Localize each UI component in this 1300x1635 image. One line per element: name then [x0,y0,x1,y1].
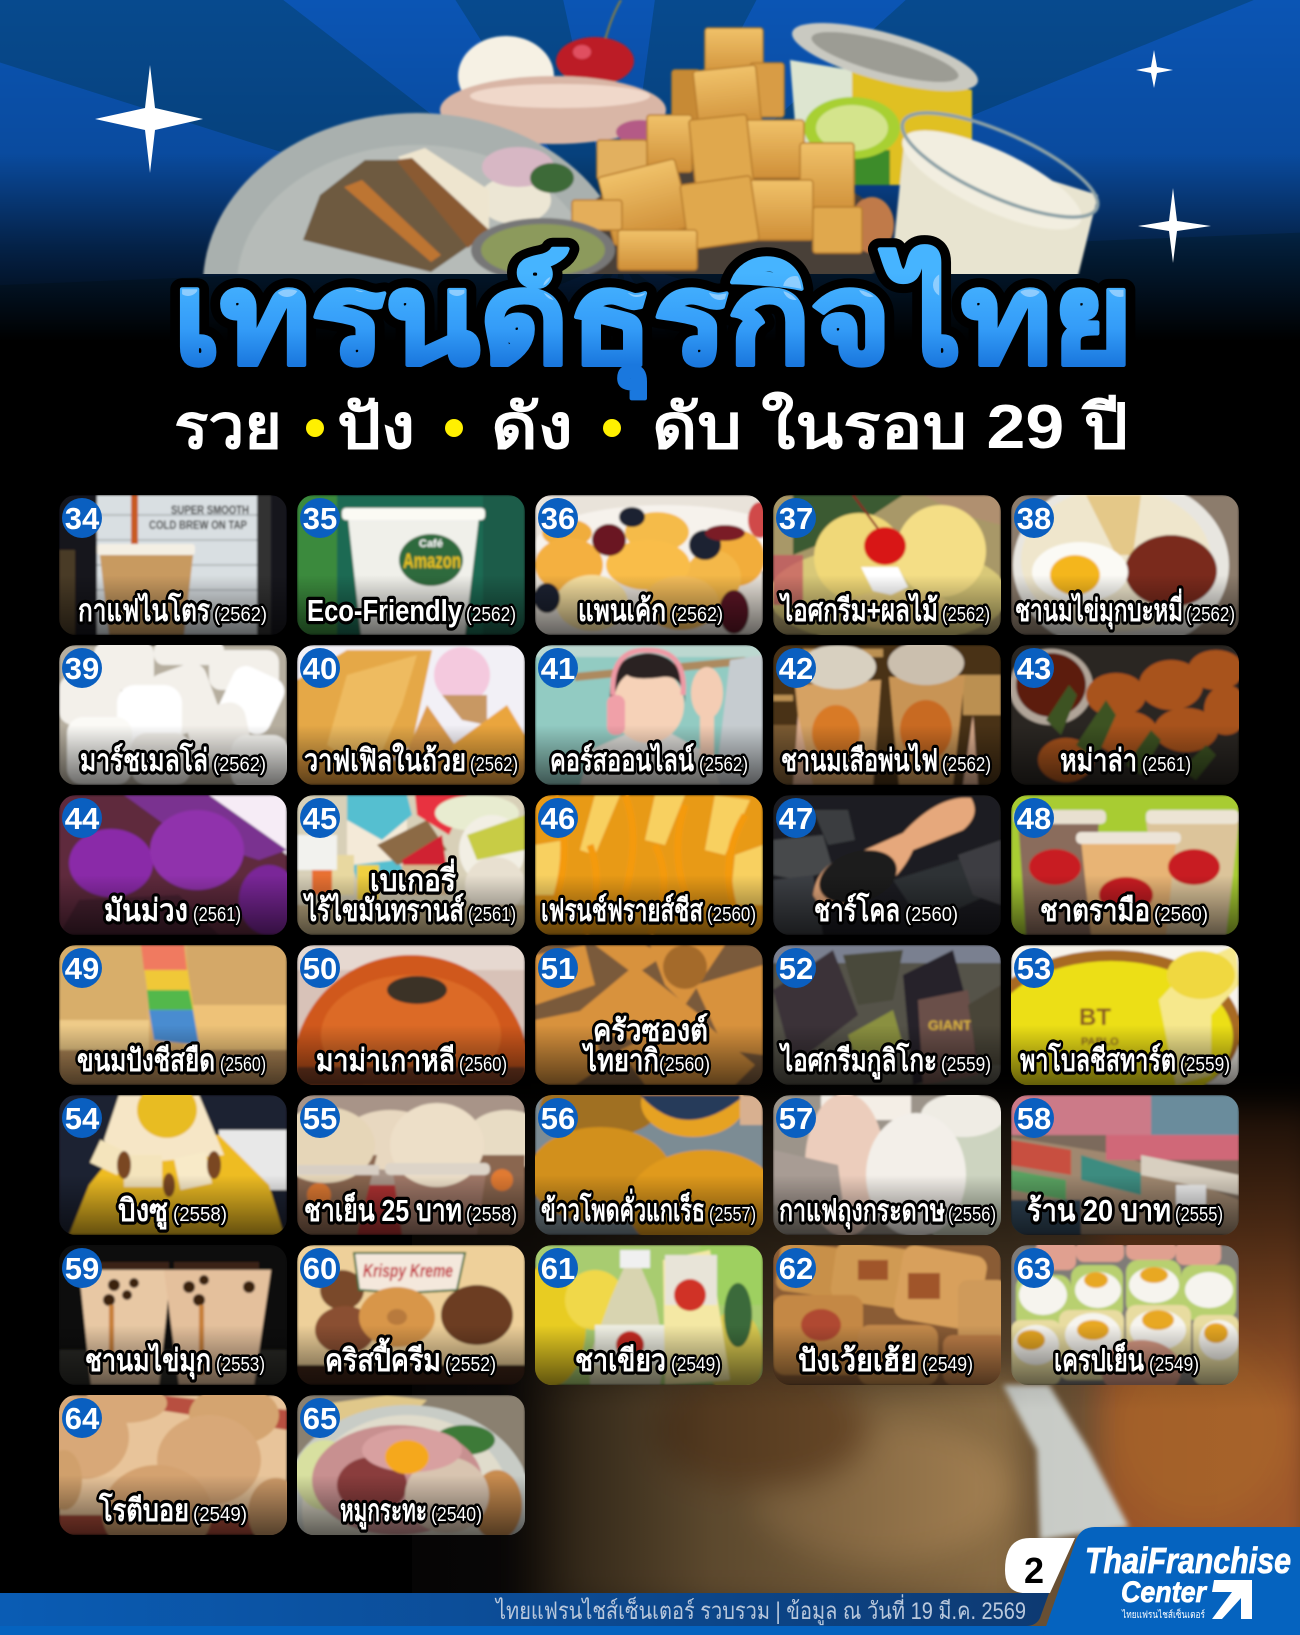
label: ชาเย็น 25 บาท [304,1191,462,1228]
label: ข้าวโพดคั่วแกเร็ธ [541,1188,705,1228]
badge: 38 [1017,501,1051,536]
card 49 [59,945,287,1085]
badge: 42 [779,651,813,686]
badge: 48 [1017,801,1051,836]
logo panel [1043,1527,1300,1635]
year: (2562) [466,604,516,626]
glass of milk [892,109,1101,274]
year: (2549) [193,1504,247,1526]
photo [773,641,1001,785]
photo [297,795,525,935]
photo [59,1245,287,1385]
card 34 [59,495,287,635]
photo [773,1090,1015,1250]
card 57 [773,1090,1015,1250]
badge: 39 [65,651,99,686]
year: (2560) [659,1054,710,1076]
card 59 [59,1245,287,1385]
card 53 [981,945,1241,1113]
photo [514,1245,763,1400]
label: โรตีบอย [98,1492,189,1528]
icon: sparkle medium [1138,188,1211,263]
label: ชานมเสือพ่นไฟ [781,742,938,778]
badge: 65 [303,1401,337,1436]
badge: 62 [779,1251,813,1286]
year: (2561) [468,904,516,926]
badge: 40 [303,651,337,686]
card 45 [297,795,525,935]
year: (2560) [459,1054,507,1076]
label: ชานมไข่มุก [85,1342,211,1380]
photo [282,1395,532,1605]
logo panel: Center [1121,1576,1208,1609]
badge: 54 [65,1101,100,1136]
year: (2558) [466,1204,517,1226]
subtitle: ดัง [491,393,573,462]
photo [59,795,299,935]
badge: 52 [779,951,813,986]
photo [1009,645,1248,785]
year: (2562) [1186,604,1235,626]
year: (2555) [1175,1204,1223,1226]
card 60 [297,1245,525,1385]
label: ปังเว้ยเฮ้ย [798,1343,917,1378]
source text: ไทยแฟรนไชส์เซ็นเตอร์ รวบรวม | ข้อมูล ณ วันที่ 19 มี.ค. 2569 [494,1594,1026,1626]
year: (2556) [948,1204,996,1226]
pink sundae bowl [440,76,666,144]
photo [773,945,1001,1085]
photo [1011,1095,1239,1235]
bowl behind bread [588,168,876,274]
photo: Krispy Kreme [363,1261,453,1281]
photo: PABLO [1081,1036,1119,1048]
badge: 49 [65,951,99,986]
icon: sparkle large [95,65,203,173]
label: หมูกระทะ [340,1493,427,1530]
label: มาร์ชเมลโล่ [80,742,208,778]
label: เครปเย็น [1054,1341,1144,1378]
label: แพนเค้ก [578,593,666,628]
card 51 [535,945,763,1085]
card 52 [773,945,1001,1085]
badge: 45 [303,801,337,836]
badge: 56 [541,1101,575,1136]
card 36 [535,495,763,635]
photo [59,1082,287,1235]
year: (2562) [470,754,518,776]
badge: 36 [541,501,575,536]
year: (2559) [1180,1054,1230,1076]
label line 2: ไร้ไขมันทรานส์ [303,892,464,928]
can [786,9,984,185]
badge: 34 [65,501,100,536]
fish [303,147,574,272]
year: (2557) [709,1204,756,1226]
year: (2561) [193,904,241,926]
bread cubes [572,28,862,270]
photo [59,640,289,790]
year: (2549) [1149,1354,1199,1376]
sauce cup [471,218,615,282]
photo [1011,1240,1239,1400]
year: (2560) [707,904,756,926]
year: (2562) [942,754,991,776]
logo panel: ไทยแฟรนไชส์เซ็นเตอร์ [1121,1607,1206,1621]
photo [59,945,287,1085]
year: (2560) [220,1054,266,1076]
subtitle: รวย [174,393,282,462]
label: ชาตรามือ [1040,893,1150,928]
year: (2560) [1154,904,1208,926]
badge: 37 [779,501,813,536]
card 43 [1009,645,1248,785]
badge: 46 [541,801,575,836]
badge: 53 [1017,951,1051,986]
photo: BT [1079,1004,1111,1031]
badge: 63 [1017,1251,1051,1286]
label: เฟรนช์ฟรายส์ชีส [541,893,703,928]
label: ชาเขียว [575,1343,666,1378]
subtitle [174,391,1128,462]
year: (2549) [922,1354,973,1376]
photo [297,645,525,785]
cherry [556,0,634,85]
photo [773,495,1001,635]
yellow dot [603,419,621,437]
badge: 44 [65,801,100,836]
ice cream scoop [456,34,556,92]
card 46 [535,795,763,935]
badge: 58 [1017,1101,1051,1136]
year: (2562) [213,754,266,776]
photo [297,1245,525,1385]
label: ไอศกรีมกูลิโกะ [779,1042,937,1080]
badge: 50 [303,951,337,986]
photo [981,945,1241,1113]
year: (2540) [431,1504,482,1526]
footer bar [0,1593,1300,1635]
subtitle: ดับ ในรอบ 29 ปี [652,391,1128,462]
label: มาม่าเกาหลี [316,1043,455,1078]
label: คริสปี้ครีม [325,1337,441,1378]
card 62 [773,1240,1008,1385]
card 39 [59,640,289,790]
icon: sparkle small [1136,50,1173,88]
badge: 61 [541,1251,575,1286]
label: ร้าน 20 บาท [1027,1193,1171,1228]
card 55 [275,1095,549,1235]
blurred tart background photo [412,1095,1300,1626]
title: เทรนด์ธุรกิจไทย [173,246,1133,399]
year: (2559) [941,1054,991,1076]
badge: 60 [303,1251,337,1286]
photo [535,645,763,785]
photo [1011,795,1239,935]
photo: Amazon [403,550,461,573]
year: (2560) [905,904,958,926]
subtitle: ปัง [337,393,415,462]
badge: 51 [541,951,575,986]
label: ไอศกรีม+ผลไม้ [779,592,938,628]
plate [202,112,602,274]
label line 2: ไทยากิ [582,1042,659,1078]
photo [59,495,287,635]
card 40 [297,645,525,785]
photo [39,1383,304,1561]
photo: Café [419,538,443,550]
photo [528,1069,783,1260]
badge: 47 [779,801,813,836]
photo: SUPER SMOOTH [171,503,249,517]
year: (2562) [942,604,990,626]
label: ชาร์โคล [814,892,900,928]
card 48 [1011,795,1239,935]
photo [535,945,763,1085]
card 41 [535,645,763,785]
card 56 [528,1069,783,1260]
card 37 [773,495,1001,635]
badge: 43 [1017,651,1051,686]
card 42 [773,641,1001,785]
card 63 [1011,1240,1239,1400]
year: (2552) [445,1354,496,1376]
photo [275,1095,549,1235]
page number tab: 2 [1024,1550,1044,1591]
label: กาแฟถุงกระดาษ [779,1193,945,1230]
label: เบเกอรี่ [370,858,456,898]
photo [1011,495,1239,635]
card 54 [59,1082,287,1235]
photo [773,795,1001,935]
year: (2549) [671,1354,721,1376]
photo: COLD BREW ON TAP [149,518,247,532]
label: Eco-Friendly [307,593,463,628]
title: เทรนด์ธุรกิจไทย [173,246,1133,399]
card 61 [514,1245,763,1400]
card 44 [59,795,299,935]
label: คอร์สออนไลน์ [550,742,694,778]
label: ครัวซองต์ [593,1013,708,1048]
yellow dot [445,419,463,437]
yellow dot [306,419,324,437]
photo [293,945,529,1185]
year: (2562) [699,754,748,776]
year: (2561) [1142,754,1191,776]
label: กาแฟไนโตร [78,592,210,628]
badge: 41 [541,651,575,686]
year: (2562) [214,604,267,626]
photo [773,1240,1008,1385]
card 50 [293,945,529,1185]
card 38 [1011,495,1239,635]
card 58 [1011,1095,1239,1235]
badge: 35 [303,501,337,536]
hero food photo collage [202,0,1101,274]
badge: 64 [65,1401,100,1436]
label: ชานมไข่มุกบะหมี่ [1015,588,1183,630]
label: พาโบลชีสทาร์ต [1020,1042,1176,1078]
card 65 [282,1395,532,1605]
card 47 [773,795,1001,935]
label: บิงซู [118,1193,168,1230]
year: (2553) [216,1354,265,1376]
label: ขนมปังชีสยืด [77,1043,215,1078]
photo [535,495,763,635]
card 35 [297,495,525,635]
label: มันม่วง [104,893,188,928]
photo [535,795,763,935]
photo: GIANT [928,1017,972,1033]
label: วาฟเฟิลในถ้วย [304,742,466,778]
card 64 [39,1383,304,1561]
label: หม่าล่า [1060,743,1137,778]
page number tab [1005,1538,1075,1593]
photo [297,495,525,635]
badge: 59 [65,1251,99,1286]
badge: 57 [779,1101,813,1136]
year: (2562) [671,604,723,626]
year: (2558) [173,1204,227,1226]
icon: arrow [1212,1580,1252,1619]
badge: 55 [303,1101,337,1136]
